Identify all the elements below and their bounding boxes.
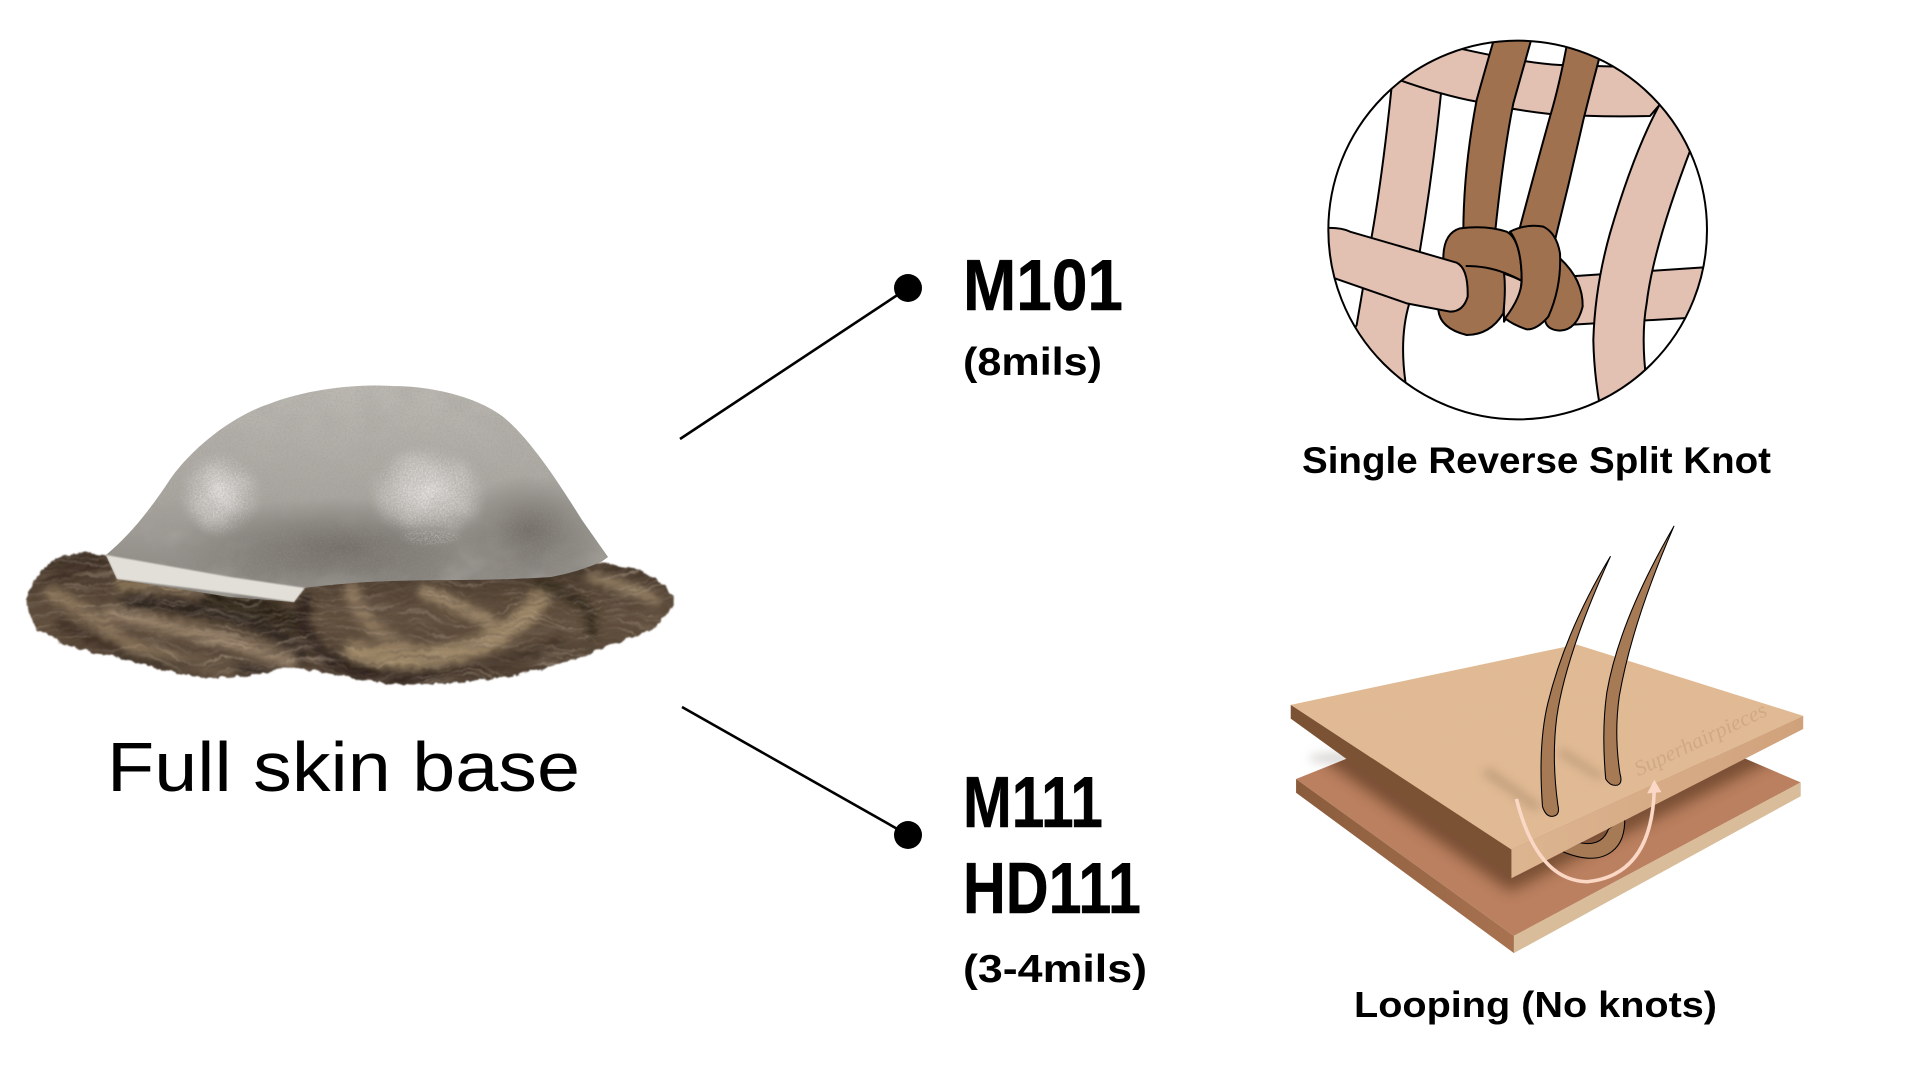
label: M101 8mils bbox=[963, 246, 1123, 384]
loop arrow bbox=[1516, 780, 1661, 882]
left vertical fibre bbox=[1355, 82, 1442, 382]
knot left loop bbox=[1438, 227, 1522, 335]
hair shadows bbox=[1482, 748, 1605, 812]
diagram: single reverse split knot bbox=[1320, 30, 1713, 419]
hair strand two bbox=[1518, 37, 1602, 240]
upper layer bbox=[1287, 641, 1809, 878]
white lace front bbox=[106, 555, 305, 602]
lower layer bbox=[1296, 738, 1801, 953]
soft shadow behind left of layers bbox=[1309, 752, 1373, 764]
connector: lower line with dot bbox=[682, 707, 922, 849]
exposed fibre in knot bbox=[1503, 273, 1522, 322]
title: Full skin base: Full skin base bbox=[107, 728, 580, 806]
label: M101 8mils: M101 bbox=[963, 246, 1123, 326]
hair strands bbox=[1541, 526, 1674, 816]
looped hair below upper layer bbox=[1562, 817, 1625, 858]
skin cap bbox=[100, 380, 615, 605]
right horizontal fibre bbox=[1567, 267, 1713, 325]
label: M111 HD111 3-4mils: HD111 bbox=[963, 849, 1141, 929]
watermark: Superhairpieces bbox=[1630, 698, 1771, 781]
label: M111 HD111 3-4mils: M111 bbox=[963, 763, 1103, 843]
foreground fibre end bbox=[1320, 228, 1468, 312]
label: M111 HD111 3-4mils bbox=[963, 763, 1147, 991]
caption: Looping (No knots): Looping (No knots) bbox=[1354, 984, 1717, 1025]
top horizontal fibre bbox=[1401, 48, 1658, 118]
label: M101 8mils: (8mils) bbox=[963, 341, 1102, 384]
photo: full skin hairpiece bbox=[20, 380, 680, 690]
hair strand one bbox=[1463, 30, 1533, 233]
knot back lobe bbox=[1545, 258, 1583, 331]
label: M111 HD111 3-4mils: (3-4mils) bbox=[963, 948, 1147, 991]
right vertical fibre bbox=[1593, 100, 1692, 407]
caption: Single Reverse Split Knot: Single Reverse Split Knot bbox=[1302, 440, 1771, 481]
connector: upper line with dot bbox=[680, 274, 922, 439]
hair fringe bbox=[20, 545, 680, 690]
diagram: looping through skin layers bbox=[1287, 526, 1809, 953]
knot middle loop bbox=[1505, 226, 1560, 329]
